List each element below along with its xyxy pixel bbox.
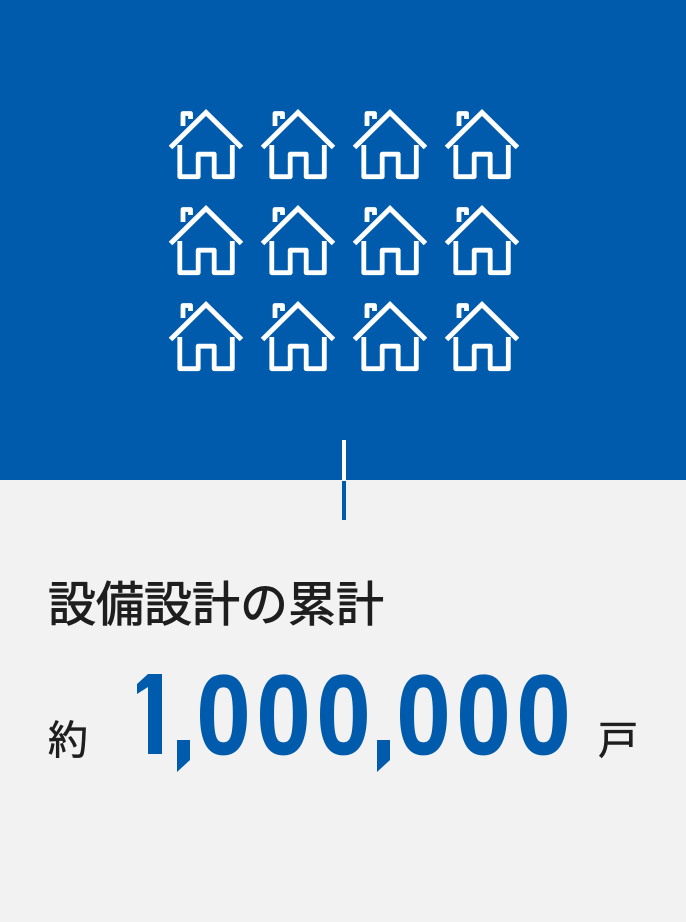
icon: house row 2 column 1: [170, 208, 242, 273]
big number: 000: [396, 653, 571, 779]
icon: house row 2 column 4: [446, 208, 518, 273]
big number: 000: [197, 653, 371, 779]
icon: house row 1 column 3: [354, 112, 426, 177]
icon: house row 3 column 4: [446, 304, 518, 369]
big number: ,: [337, 428, 448, 875]
big number: [137, 674, 567, 772]
icon: house row 3 column 1: [170, 304, 242, 369]
icon: house row 2 column 2: [262, 208, 334, 273]
panel: blue header: [0, 0, 686, 480]
icon: house row 1 column 4: [446, 112, 518, 177]
icon: house row 1 column 1: [170, 112, 242, 177]
icon: house row 3 column 2: [262, 304, 334, 369]
label: units: 戸: [598, 719, 638, 763]
icon grid: houses: [170, 112, 518, 369]
icon: house row 3 column 3: [354, 304, 426, 369]
big number: 1: [34, 438, 256, 885]
icon: house row 2 column 3: [354, 208, 426, 273]
panel: light lower background: [0, 480, 686, 922]
icon: house row 1 column 2: [262, 112, 334, 177]
big number: ,: [137, 428, 248, 875]
connector line: [342, 440, 346, 520]
label: approximately: 約: [48, 719, 88, 763]
heading: 設備設計の累計: [48, 579, 384, 632]
